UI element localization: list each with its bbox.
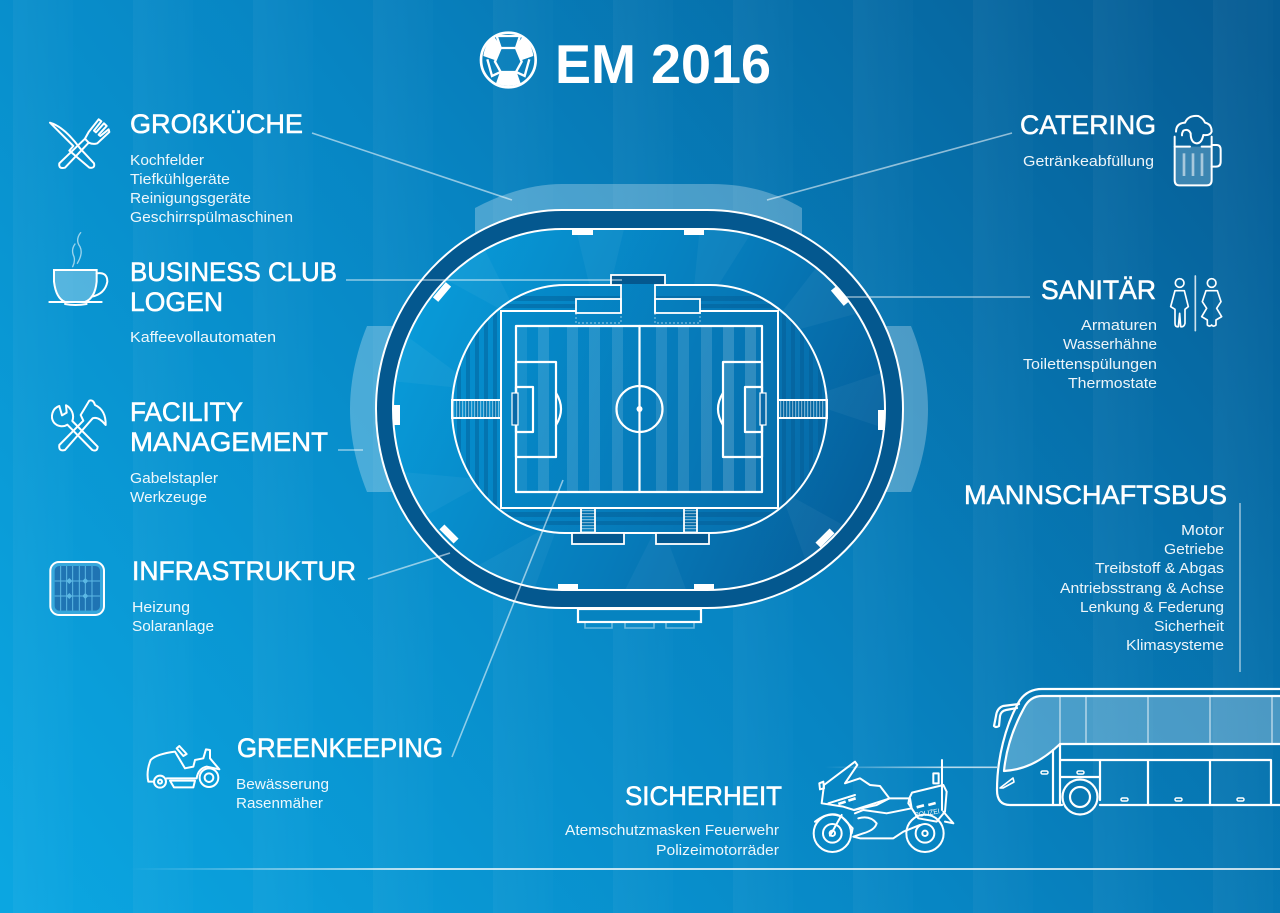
list: Armaturen xyxy=(1081,317,1157,334)
icon: team bus xyxy=(994,689,1280,814)
list: Kaffeevollautomaten xyxy=(130,329,276,346)
icon: tools xyxy=(52,400,106,451)
bus outline xyxy=(997,689,1280,805)
heading: MANNSCHAFTSBUS xyxy=(964,480,1227,510)
list: Antriebsstrang & Achse xyxy=(1060,580,1224,597)
stadium outer ring xyxy=(376,210,903,608)
heading: GREENKEEPING xyxy=(237,733,443,763)
list xyxy=(132,599,214,635)
list xyxy=(236,776,329,812)
pitch xyxy=(512,326,766,492)
list: Thermostate xyxy=(1068,375,1157,392)
white gates xyxy=(394,229,885,590)
heading: GROßKÜCHE xyxy=(130,109,303,139)
bus mirror xyxy=(994,704,1019,727)
field surround xyxy=(501,311,778,508)
top structures xyxy=(576,275,700,313)
icon: beer mug xyxy=(1175,116,1221,185)
heading: CATERING xyxy=(1020,110,1156,140)
icon: police motorcycle xyxy=(814,760,953,852)
bus wheel xyxy=(1062,780,1098,814)
title xyxy=(481,33,771,95)
list: Motor xyxy=(1181,522,1224,539)
pitch markings xyxy=(516,326,762,492)
stands xyxy=(393,229,885,590)
stand outline xyxy=(393,229,885,590)
heading: BUSINESS CLUB xyxy=(130,257,337,287)
panel: sicherheit xyxy=(565,760,997,859)
list: Rasenmäher xyxy=(236,795,323,812)
list: Lenkung & Federung xyxy=(1080,599,1224,616)
bus headlight xyxy=(1000,778,1014,788)
bus latches xyxy=(1041,771,1244,801)
list: Treibstoff & Abgas xyxy=(1095,560,1224,577)
list: Getriebe xyxy=(1164,541,1224,558)
heading: INFRASTRUKTUR xyxy=(132,556,356,586)
panel: business club xyxy=(49,233,337,346)
callout lines xyxy=(312,133,1240,757)
list xyxy=(1060,522,1225,654)
seating stripes xyxy=(457,296,822,525)
icon: solar panel xyxy=(50,562,104,615)
inner bowl xyxy=(452,285,827,533)
bus panels xyxy=(1053,744,1271,805)
list: Gabelstapler xyxy=(130,470,218,487)
panel: grosskueche xyxy=(50,109,303,226)
centre spot xyxy=(636,406,642,412)
panel: greenkeeping xyxy=(148,733,443,812)
bottom structures xyxy=(572,508,709,544)
heading: SANITÄR xyxy=(1041,275,1156,305)
side stairs xyxy=(452,400,827,418)
list: Bewässerung xyxy=(236,776,329,793)
heading: FACILITY xyxy=(130,397,243,427)
list xyxy=(1023,317,1157,392)
bus windows xyxy=(1004,696,1280,771)
list: Solaranlage xyxy=(132,618,214,635)
stadium xyxy=(350,184,928,628)
panel: sanitaer xyxy=(1023,275,1222,392)
stand rays xyxy=(380,220,890,600)
icon: cutlery xyxy=(50,119,109,168)
list: Tiefkühlgeräte xyxy=(130,171,230,188)
list: Heizung xyxy=(132,599,190,616)
panel: facility management xyxy=(52,397,328,506)
heading line 2: MANAGEMENT xyxy=(130,427,328,457)
panel: infrastruktur xyxy=(50,556,356,635)
heading line 2: LOGEN xyxy=(130,287,223,317)
list: Getränkeabfüllung xyxy=(1023,153,1154,170)
panel: catering xyxy=(1020,110,1221,185)
bowl outline xyxy=(452,285,827,533)
list: Werkzeuge xyxy=(130,489,207,506)
list xyxy=(565,822,779,859)
baseline xyxy=(130,868,1280,870)
list xyxy=(130,470,218,506)
list: Toilettenspülungen xyxy=(1023,356,1157,373)
icon: coffee cup xyxy=(49,233,107,305)
icon: ride-on mower xyxy=(148,746,219,788)
list: Kochfelder xyxy=(130,152,204,169)
stadium wings xyxy=(350,184,928,492)
list xyxy=(130,152,293,226)
icon: football xyxy=(481,33,536,87)
list: Polizeimotorräder xyxy=(656,842,779,859)
list: Geschirrspülmaschinen xyxy=(130,209,293,226)
panel: mannschaftsbus xyxy=(964,480,1280,814)
dashed areas xyxy=(576,313,700,323)
goals xyxy=(512,393,766,425)
icon: police motorcycle: POLIZEI xyxy=(914,806,940,820)
bus window dividers xyxy=(1060,696,1272,744)
bus connector line xyxy=(825,766,997,768)
list: Reinigungsgeräte xyxy=(130,190,251,207)
list: Wasserhähne xyxy=(1063,336,1157,353)
list: Atemschutzmasken Feuerwehr xyxy=(565,822,779,839)
list: Sicherheit xyxy=(1154,618,1225,635)
bottom tab xyxy=(578,609,701,628)
mowing stripes xyxy=(516,327,756,491)
icon: restroom xyxy=(1171,276,1222,331)
list: Klimasysteme xyxy=(1126,637,1224,654)
heading: SICHERHEIT xyxy=(625,781,782,811)
title text: EM 2016 xyxy=(555,33,771,95)
